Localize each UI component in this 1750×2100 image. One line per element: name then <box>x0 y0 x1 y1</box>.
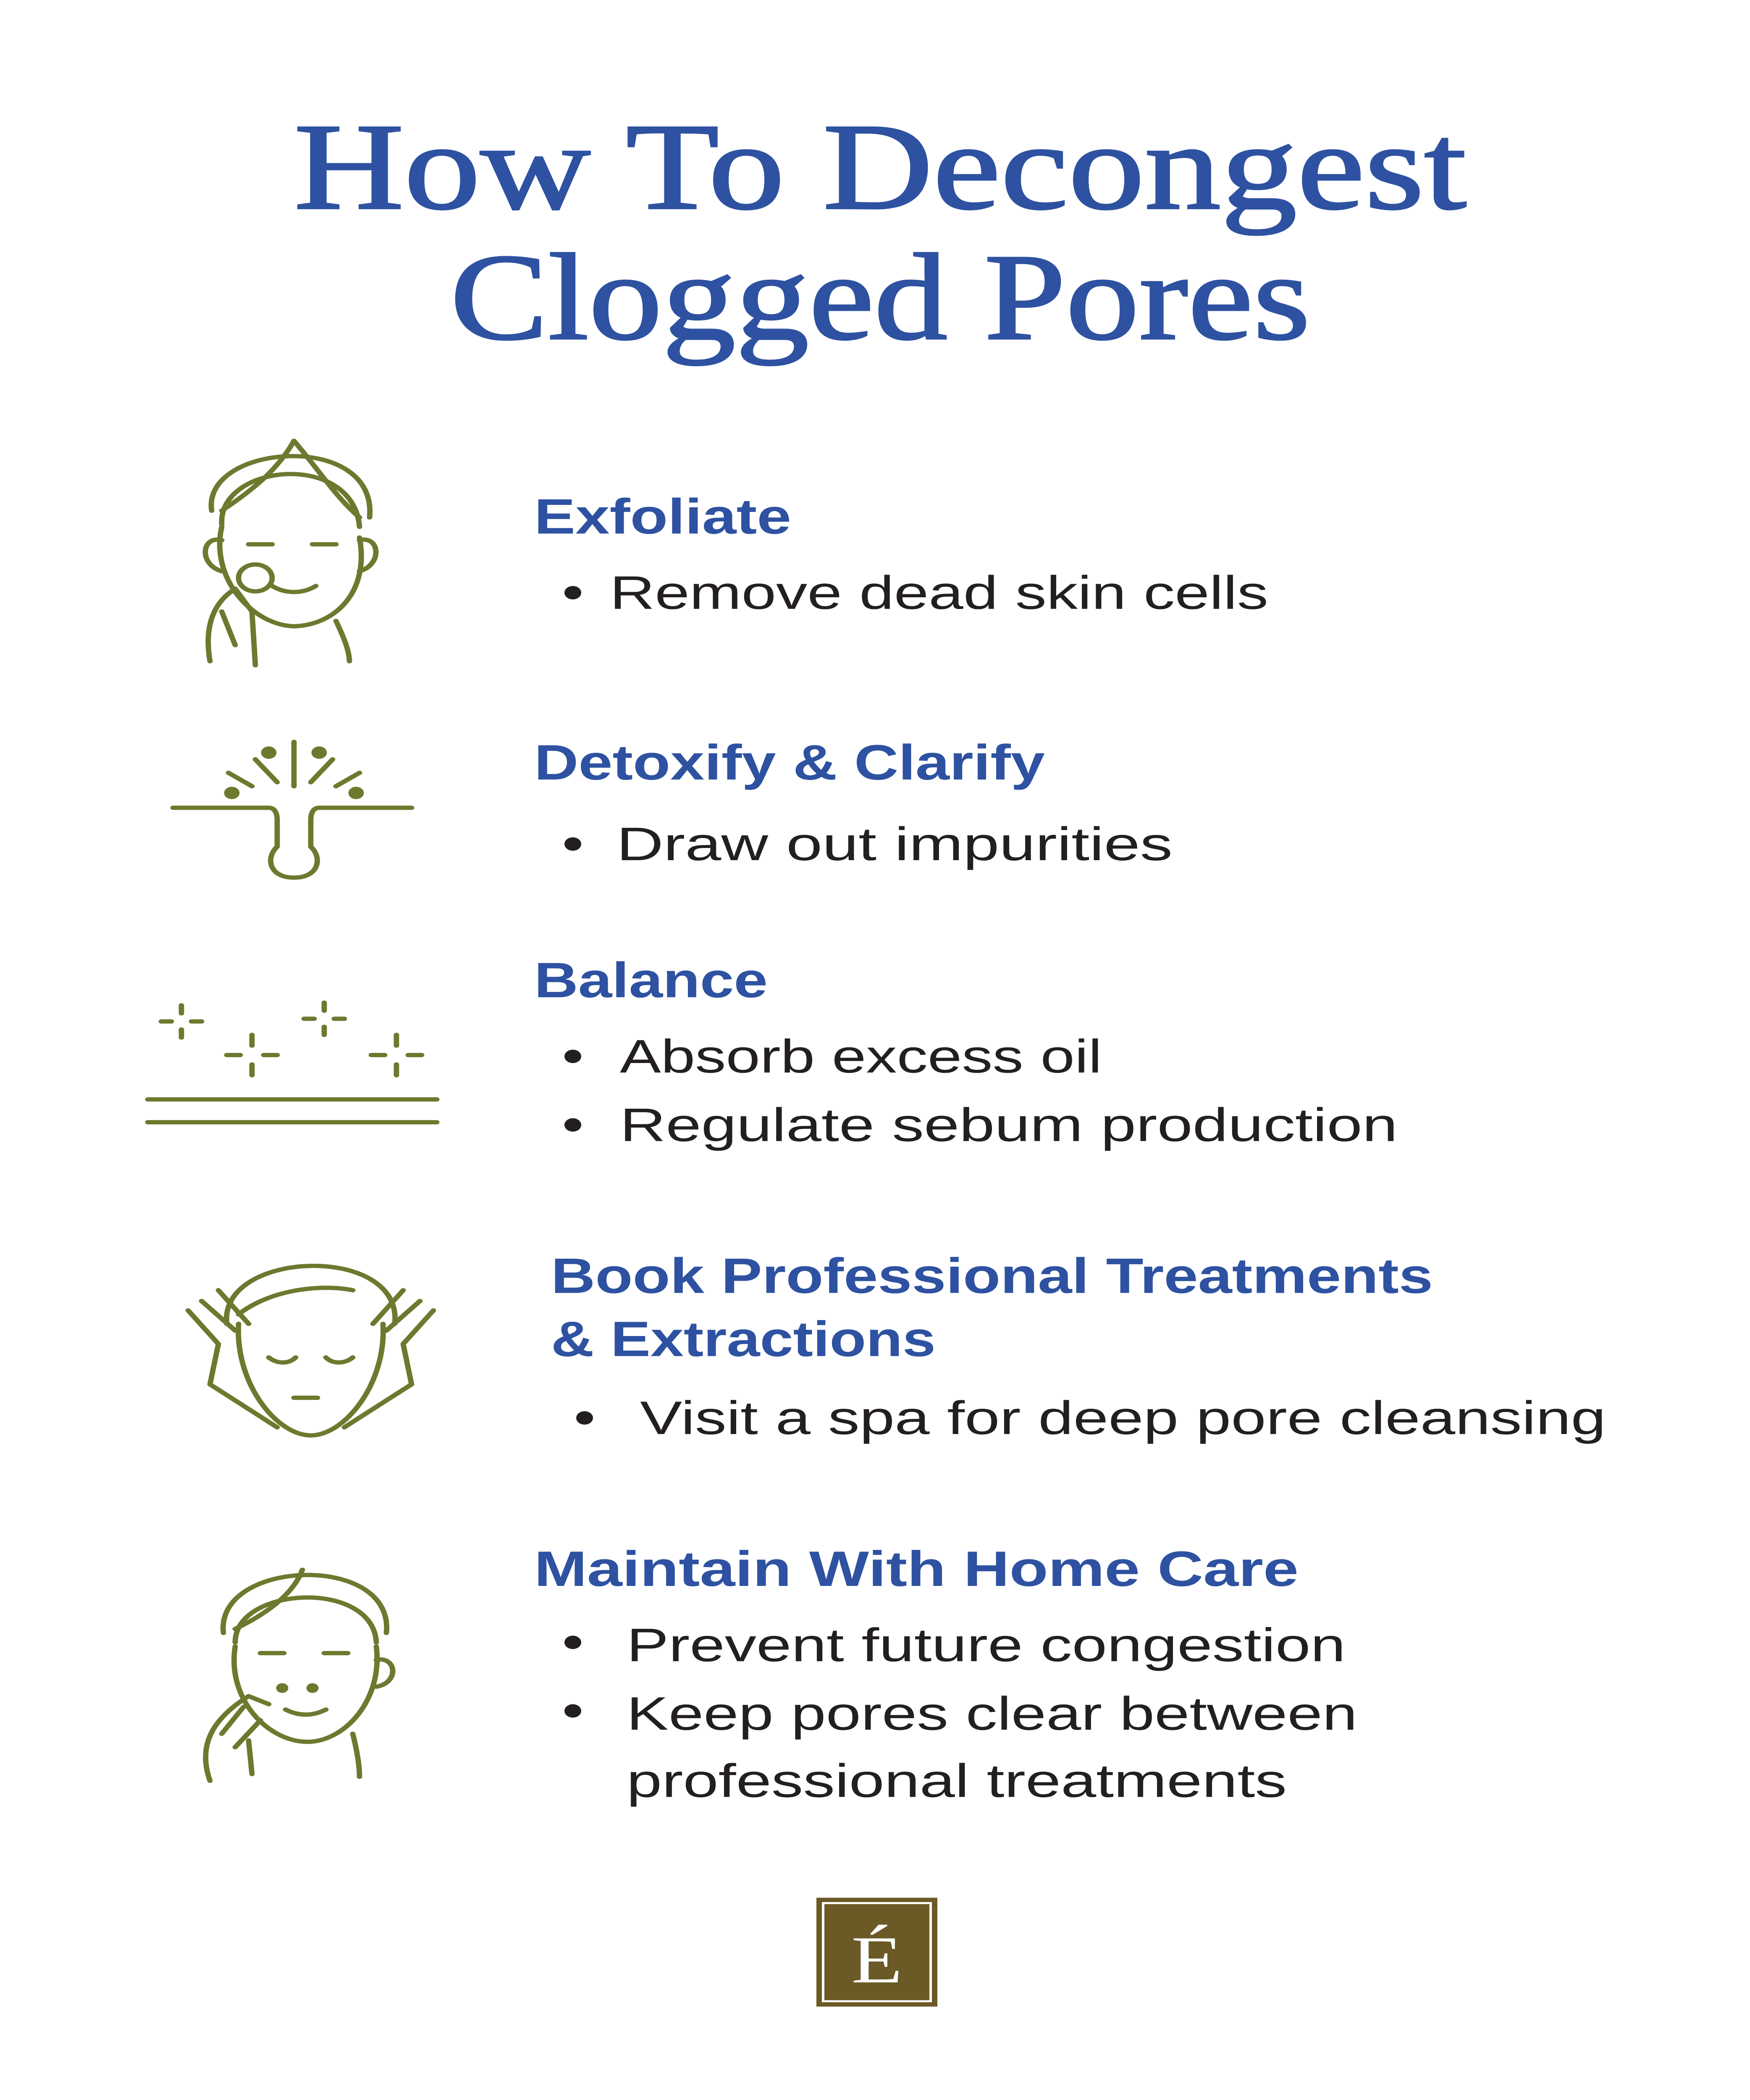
icon: balance <box>148 1003 437 1122</box>
bullets: balance: Absorb excess oil <box>620 1030 1102 1082</box>
heading: book professional treatments: Book Professional Treatments <box>551 1248 1433 1304</box>
icon: professional facial <box>188 1266 433 1436</box>
title <box>294 98 1467 366</box>
heading: exfoliate: Exfoliate <box>534 489 791 544</box>
bullet: draw out impurities: Draw out impurities <box>617 817 1173 870</box>
bullets: balance <box>564 1030 1398 1151</box>
title: Clogged Pores <box>450 229 1310 366</box>
bullets: maintain: Prevent future congestion <box>627 1619 1346 1671</box>
title: How To Decongest <box>294 98 1467 235</box>
icon: home care face <box>206 1570 393 1781</box>
logo: É <box>851 1923 903 1997</box>
heading: book professional treatments <box>551 1248 1433 1367</box>
icon: pore detox <box>173 742 412 878</box>
logo <box>816 1898 937 2007</box>
bullets: maintain <box>564 1619 1357 1807</box>
heading: balance: Balance <box>534 953 768 1008</box>
heading: book professional treatments: & Extractions <box>551 1312 936 1367</box>
bullets: balance: Regulate sebum production <box>620 1098 1398 1151</box>
bullet: remove dead skin cells: Remove dead skin cells <box>610 566 1268 619</box>
heading: detoxify: Detoxify & Clarify <box>534 735 1045 790</box>
bullets: maintain: professional treatments <box>627 1754 1287 1807</box>
heading: maintain: Maintain With Home Care <box>534 1541 1299 1597</box>
bullet: visit a spa: Visit a spa for deep pore cleansing <box>640 1391 1606 1444</box>
bullets: maintain: Keep pores clear between <box>627 1687 1357 1740</box>
icon: face exfoliating <box>205 441 376 665</box>
